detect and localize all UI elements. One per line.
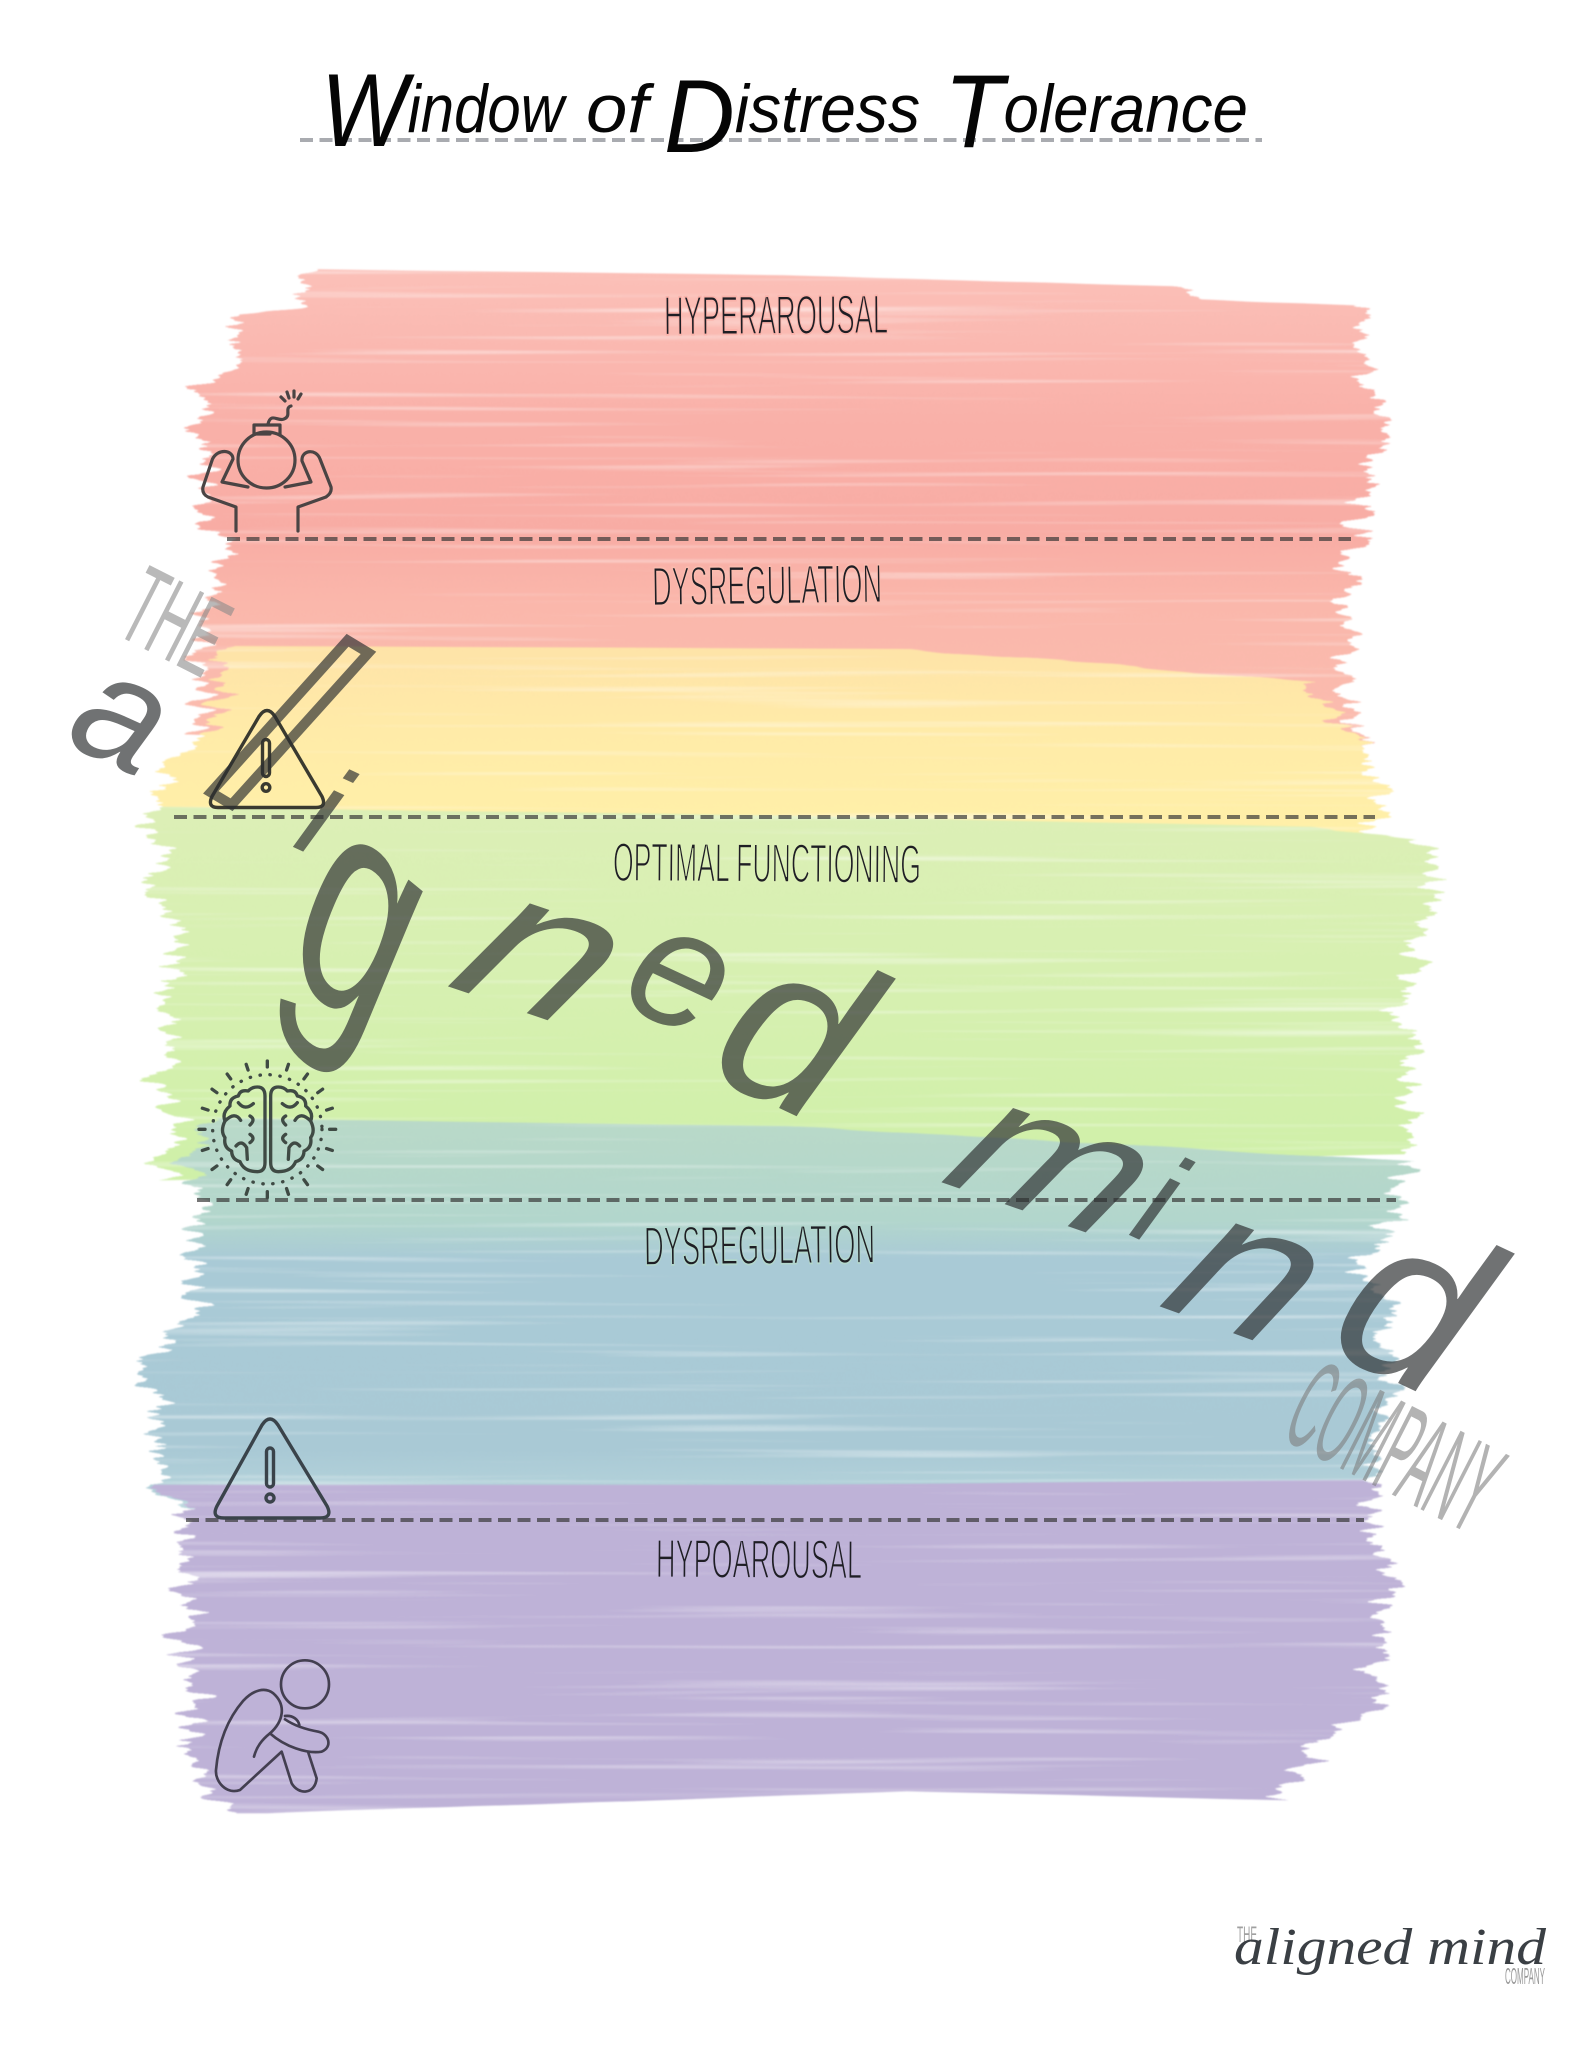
title: istress [735,71,920,147]
zone dividers [174,539,1396,1520]
text: DYSREGULATION [652,552,882,618]
title: indow [407,71,567,147]
icon: curled up person [216,1660,329,1792]
watermark: aligned mind: i [1115,1127,1206,1273]
watermark: aligned mind: g [256,702,510,1083]
text: HYPERAROUSAL [664,283,888,347]
band: teal and blue [151,1118,1416,1509]
footer logo [1234,1919,1547,1989]
watermark: aligned mind: a [48,615,199,808]
text: DYSREGULATION [644,1213,875,1277]
band: lavender hypoarousal [171,1480,1390,1813]
title: D [664,59,735,175]
watermark: aligned mind: i [279,739,370,885]
band: green optimal functioning [158,807,1428,1180]
watermark: aligned mind: e [600,863,766,1075]
logo: aligned mind: aligned mind [1234,1919,1547,1976]
icon: person holding bomb [203,391,331,531]
painted colour bands [151,269,1428,1813]
icon: brain with rays [199,1061,336,1198]
watermark: the: THE [103,543,248,700]
title underline [300,138,1262,142]
icon: upper warning triangle [210,710,324,808]
watermark: aligned mind: n [1139,1150,1351,1399]
watermark: aligned mind: m [922,1042,1175,1295]
watermark: aligned mind: d [683,884,913,1174]
title: T [944,54,1010,170]
band: red hyperarousal and dysregulation [197,269,1384,788]
watermark: aligned mind: l [177,575,396,876]
watermark: aligned mind: d [1302,1159,1532,1449]
text: OPTIMAL FUNCTIONING [613,831,921,895]
footer logo: THE [1237,1922,1257,1947]
text: HYPOAROUSAL [656,1527,862,1591]
title: W [321,53,415,169]
watermark: aligned mind: n [427,830,648,1083]
title: of [586,71,655,147]
title: olerance [1004,71,1248,147]
icon: lower warning triangle [215,1419,329,1518]
band: yellow [158,646,1388,840]
